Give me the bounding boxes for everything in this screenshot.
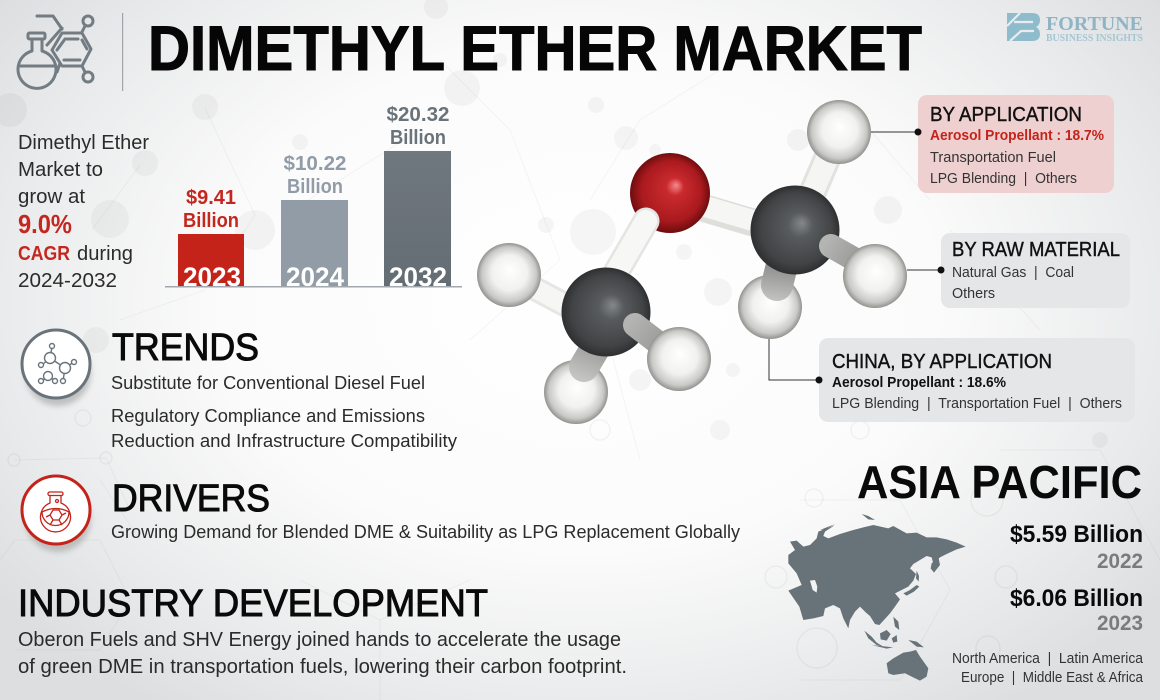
bar: 2023: $9.41 (186, 187, 236, 209)
text: industry development description (18, 629, 627, 678)
divider (122, 13, 123, 91)
bar: 2032 (384, 104, 451, 292)
logo: Fortune Business Insights (1007, 13, 1143, 44)
callout: China by application (769, 338, 1135, 422)
stat: 2022 value: $5.59 Billion (1010, 521, 1143, 548)
callout: by application: Transportation Fuel (930, 149, 1056, 166)
heading: Asia Pacific: ASIA PACIFIC (857, 456, 1142, 508)
stat: 2022 value (1010, 521, 1143, 573)
text: trends list: Regulatory Compliance and Emissions (111, 406, 425, 426)
text: trends list: Substitute for Conventional Diesel Fuel (111, 373, 425, 393)
stat: 2023 value (1010, 585, 1143, 635)
callout: China by application: Aerosol Propellant : 18.6% (832, 375, 1006, 391)
callout: by raw material: BY RAW MATERIAL (952, 239, 1120, 261)
text: CAGR growth statement: 2024-2032 (18, 269, 117, 292)
text: CAGR growth statement: during (77, 242, 133, 265)
callout: by application: LPG Blending | Others (930, 170, 1077, 187)
callout: by application (871, 95, 1114, 193)
bar: 2024: 2024 (286, 262, 344, 292)
stat: 2023 value: $6.06 Billion (1010, 585, 1143, 612)
callout: by raw material: Natural Gas | Coal (952, 264, 1074, 281)
text: industry development description: Oberon Fuels and SHV Energy joined hands to accelerate the usage (18, 629, 621, 651)
bar: 2023: 2023 (183, 262, 241, 292)
callout: by application: Aerosol Propellant : 18.7% (930, 128, 1104, 144)
heading: drivers: DRIVERS (112, 478, 270, 520)
bar: 2024 (281, 153, 348, 292)
text: trends list: Reduction and Infrastructure Compatibility (111, 431, 457, 451)
icon: flask and molecule (18, 16, 93, 88)
text: CAGR growth statement: 9.0% (18, 209, 72, 239)
callout: by raw material: Others (952, 285, 995, 302)
stat: 2023 value: 2023 (1097, 612, 1143, 635)
map: Asia Pacific (788, 514, 966, 681)
text: CAGR growth statement: Market to (18, 158, 103, 181)
heading: trends: TRENDS (112, 327, 259, 369)
text: industry development description: of green DME in transportation fuels, lowering their carbon footprint. (18, 656, 627, 678)
heading: industry development: INDUSTRY DEVELOPMENT (18, 583, 488, 625)
text: other regions (952, 651, 1144, 686)
bar: 2023: Billion (183, 210, 239, 232)
icon: drivers flask (22, 476, 91, 552)
bar: 2023 (178, 187, 244, 292)
icon: trends molecules (22, 330, 91, 406)
callout: by application: BY APPLICATION (930, 104, 1082, 126)
text: CAGR growth statement: grow at (18, 185, 85, 208)
logo: Fortune Business Insights: FORTUNE (1046, 13, 1143, 35)
text: other regions: Europe | Middle East & Africa (961, 670, 1144, 686)
bar: 2032: 2032 (389, 262, 447, 292)
bar: 2024: $10.22 (284, 153, 346, 175)
stat: 2022 value: 2022 (1097, 550, 1143, 573)
text: other regions: North America | Latin America (952, 651, 1144, 667)
text: CAGR growth statement (18, 131, 149, 292)
molecule: dimethyl ether ball and stick (477, 100, 907, 424)
title: DIMETHYL ETHER MARKET (148, 14, 922, 84)
callout: China by application: CHINA, BY APPLICATION (832, 351, 1052, 373)
text: drivers description: Growing Demand for Blended DME & Suitability as LPG Replacement Globally (111, 522, 740, 542)
logo: Fortune Business Insights: BUSINESS INSIGHTS (1046, 33, 1143, 44)
callout: China by application: LPG Blending | Transportation Fuel | Others (832, 395, 1122, 412)
callout: by raw material (907, 233, 1130, 308)
bar: 2032: $20.32 (386, 104, 450, 126)
text: trends list (111, 373, 457, 451)
bar: 2032: Billion (390, 127, 446, 149)
bar: 2024: Billion (287, 176, 343, 198)
bar chart (165, 104, 462, 292)
text: CAGR growth statement: Dimethyl Ether (18, 131, 149, 154)
text: CAGR growth statement: CAGR (18, 242, 70, 265)
